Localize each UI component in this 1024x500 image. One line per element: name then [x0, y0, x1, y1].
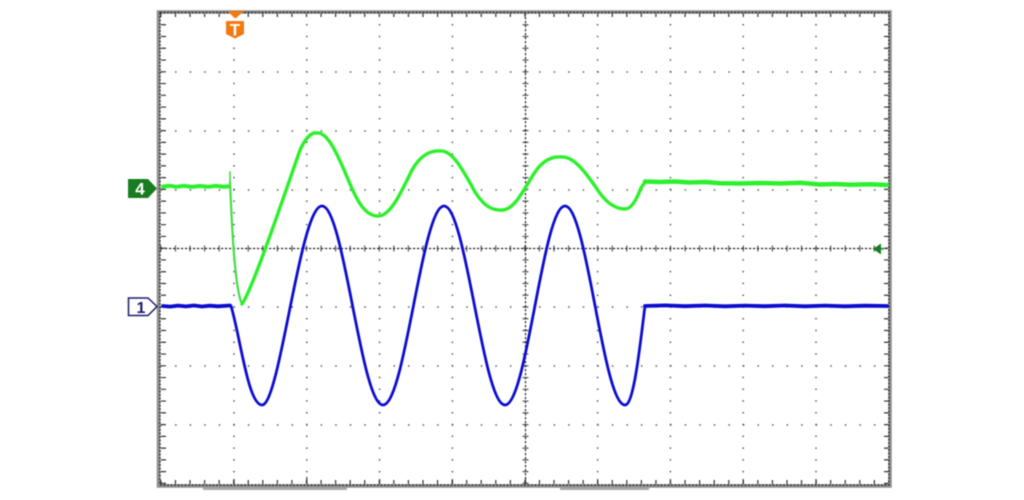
bottom scroll bars — [203, 488, 347, 490]
channel 1 marker: 1 — [137, 300, 146, 317]
trigger marker: T — [226, 11, 244, 40]
edge ticks — [160, 12, 889, 484]
channel 4 marker: 4 — [135, 180, 145, 198]
green trace: channel 4 — [163, 133, 887, 304]
channel 1 marker — [128, 298, 157, 317]
frame — [158, 12, 890, 486]
blue trace: channel 1 — [163, 206, 887, 405]
centre cross — [160, 12, 889, 484]
graticule: dotted grid and frame — [158, 12, 890, 490]
channel 4 marker — [128, 179, 157, 198]
trigger marker: T: T — [230, 20, 241, 40]
trigger level arrow — [873, 244, 884, 254]
